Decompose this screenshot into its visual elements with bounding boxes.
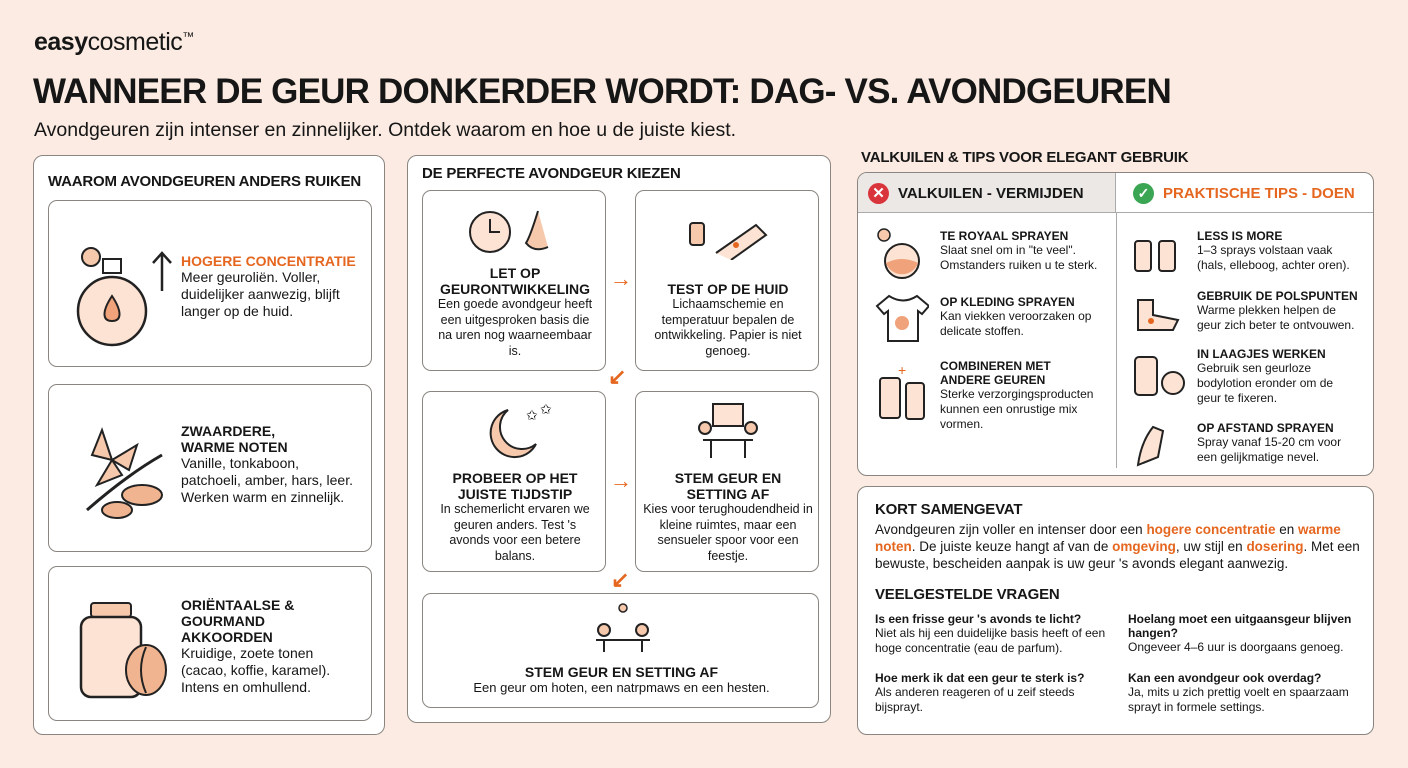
card: noten — [48, 384, 372, 552]
text — [181, 597, 330, 695]
icon: perfume bottle — [76, 247, 172, 346]
card: huid — [635, 190, 819, 371]
text: HOGERE CONCENTRATIE — [181, 253, 356, 269]
item: combineren — [879, 359, 1093, 431]
panel: valkuilen & tips — [857, 172, 1374, 476]
text: In schemerlicht ervaren we geuren anders. Test 's avonds voor een betere balans. — [440, 502, 590, 562]
text: ZWAARDERE, — [181, 423, 275, 439]
faq 2 — [1128, 612, 1351, 654]
faq 3: Hoe merk ik dat een geur te sterk is? — [875, 671, 1084, 685]
heading: kort samengevat: KORT SAMENGEVAT — [875, 501, 1022, 518]
item: polspunten: Warme plekken helpen de — [1197, 303, 1336, 317]
icon: moon: ✩ — [526, 407, 538, 423]
item: polspunten: GEBRUIK DE POLSPUNTEN — [1197, 289, 1358, 303]
item: te royaal: TE ROYAAL SPRAYEN — [940, 229, 1068, 243]
text: STEM GEUR EN SETTING AF — [525, 664, 718, 680]
item: te royaal: Slaat snel om in "te veel". — [940, 243, 1076, 257]
card: setting — [635, 391, 819, 572]
item: te royaal: Omstanders ruiken u te sterk. — [940, 258, 1097, 272]
header: tips: PRAKTISCHE TIPS - DOEN — [1163, 185, 1355, 202]
faq 4: Ja, mits u zich prettig voelt en spaarzaam sprayt in formele settings. — [1128, 685, 1349, 714]
header: tips: ✓ — [1138, 185, 1149, 201]
heading: FAQ: VEELGESTELDE VRAGEN — [875, 586, 1060, 603]
text: Vanille, tonkaboon, patchoeli, amber, hars, leer. Werken warm en zinnelijk. — [181, 455, 353, 505]
header: tips — [1116, 173, 1375, 213]
text: Een goede avondgeur heeft een uitgesproken basis die na uren nog waarneembaar is. — [438, 297, 592, 358]
faq 2: Hoelang moet een uitgaansgeur blijven hangen? — [1128, 612, 1351, 640]
text: PROBEER OP HET — [452, 470, 578, 486]
arrow: → — [610, 468, 632, 493]
subtitle: Avondgeuren zijn intenser en zinnelijker. Ontdek waarom en hoe u de juiste kiest. — [34, 119, 736, 141]
icon: dining — [698, 403, 758, 458]
icon: jar with bean — [80, 602, 167, 698]
card: bottom — [422, 593, 819, 708]
faq 1: Is een frisse geur 's avonds te licht? — [875, 612, 1081, 626]
arrow: ↙ — [611, 567, 629, 592]
faq 3: Als anderen reageren of u zeif steeds bijsprayt. — [875, 685, 1074, 714]
item: kleding: Kan viekken veroorzaken op — [940, 309, 1091, 323]
text: Lichaamschemie en temperatuur bepalen de ontwikkeling. Papier is niet genoeg. — [654, 297, 802, 358]
item: less is more: LESS IS MORE — [1197, 229, 1282, 243]
item: afstand: een gelijkmatige nevel. — [1197, 450, 1319, 464]
icon: vanilla — [86, 427, 163, 519]
item: laagjes: geur te fixeren. — [1197, 391, 1277, 405]
card: geurontwikkeling — [422, 190, 606, 371]
card: tijdstip — [422, 391, 606, 572]
faq 3 — [875, 671, 1084, 714]
text — [181, 423, 353, 505]
item: laagjes: IN LAAGJES WERKEN — [1197, 347, 1326, 361]
item: afstand — [1136, 421, 1341, 466]
item: less is more: (hals, elleboog, achter oren). — [1197, 258, 1350, 272]
text: GEURONTWIKKELING — [440, 281, 590, 297]
card: concentratie — [48, 200, 372, 367]
text: ORIËNTAALSE & — [181, 597, 294, 613]
text: LET OP — [490, 265, 540, 281]
item: polspunten: geur zich beter te ontvouwen. — [1197, 318, 1354, 332]
text — [643, 470, 813, 562]
faq 2: Ongeveer 4–6 uur is doorgaans genoeg. — [1128, 640, 1344, 654]
summary text: Avondgeuren zijn voller en intenser door een hogere concentratie en warme noten. De juiste keuze hangt af van de omgeving, uw stijl en dosering. Met een bewuste, bescheiden aanpak is uw geur 's avonds elegant aanwezig. — [875, 522, 1360, 571]
header: valkuilen: ✕ — [872, 185, 885, 202]
icon: clock and nose — [469, 210, 548, 253]
item: combineren: vormen. — [940, 417, 983, 431]
text: AKKOORDEN — [181, 629, 273, 645]
heading: DE PERFECTE AVONDGEUR KIEZEN — [422, 165, 681, 182]
logo: easycosmetic™ — [34, 28, 194, 56]
text: Kies voor terughoudendheid in kleine ruimtes, maar een sensueler spoor voor een feestje. — [643, 502, 813, 562]
item: kleding — [876, 294, 1091, 342]
text — [473, 664, 770, 695]
item: kleding: OP KLEDING SPRAYEN — [940, 295, 1075, 309]
text — [181, 253, 356, 319]
text — [440, 470, 590, 562]
item: laagjes: Gebruik sen geurloze — [1197, 361, 1311, 375]
item: polspunten — [1137, 289, 1358, 332]
item: combineren: COMBINEREN MET — [940, 359, 1051, 373]
text: Meer geuroliën. Voller, duidelijker aanwezig, blijft langer op de huid. — [181, 269, 340, 319]
panel: samenvatting & FAQ — [857, 486, 1374, 735]
item: less is more: 1–3 sprays volstaan vaak — [1197, 243, 1332, 257]
faq 1: Niet als hij een duidelijke basis heeft of een hoge concentratie (eau de parfum). — [875, 626, 1105, 655]
faq 4 — [1128, 671, 1349, 714]
text: SETTING AF — [687, 486, 769, 502]
text: GOURMAND — [181, 613, 265, 629]
icon: arm spray — [689, 222, 768, 260]
item: less is more — [1134, 229, 1350, 272]
text: Kruidige, zoete tonen (cacao, koffie, karamel). Intens en omhullend. — [181, 645, 330, 695]
item: combineren: kunnen een onrustige mix — [940, 402, 1077, 416]
text: Een geur om hoten, een natrpmaws en een hesten. — [473, 680, 770, 695]
icon: moon — [490, 402, 552, 458]
text: TEST OP DE HUID — [667, 281, 789, 297]
title: WANNEER DE GEUR DONKERDER WORDT: DAG- VS. AVONDGEUREN — [33, 72, 1171, 111]
item: laagjes: bodylotion eronder om de — [1197, 376, 1333, 390]
text: JUISTE TIJDSTIP — [458, 486, 572, 502]
panel: waarom — [33, 155, 385, 735]
item: afstand: Spray vanaf 15-20 cm voor — [1197, 435, 1341, 449]
card: oriëntaals — [48, 566, 372, 721]
item: te royaal — [877, 228, 1097, 279]
faq 4: Kan een avondgeur ook overdag? — [1128, 671, 1321, 685]
icon: party — [596, 603, 650, 652]
arrow: → — [610, 266, 632, 291]
item: combineren: Sterke verzorgingsproducten — [940, 387, 1093, 401]
item: kleding: delicate stoffen. — [940, 324, 1024, 338]
heading: valkuilen & tips: VALKUILEN & TIPS VOOR ELEGANT GEBRUIK — [861, 149, 1188, 166]
heading: WAAROM AVONDGEUREN ANDERS RUIKEN — [48, 173, 361, 190]
header: valkuilen: VALKUILEN - VERMIJDEN — [898, 185, 1084, 202]
text — [438, 265, 592, 358]
header: valkuilen — [858, 173, 1116, 213]
faq 1 — [875, 612, 1105, 655]
panel: kiezen — [407, 155, 831, 723]
text: STEM GEUR EN — [675, 470, 781, 486]
item: combineren: ANDERE GEUREN — [940, 373, 1045, 387]
item: laagjes — [1134, 347, 1333, 405]
text: WARME NOTEN — [181, 439, 288, 455]
item: afstand: OP AFSTAND SPRAYEN — [1197, 421, 1334, 435]
arrow: ↙ — [608, 364, 626, 389]
